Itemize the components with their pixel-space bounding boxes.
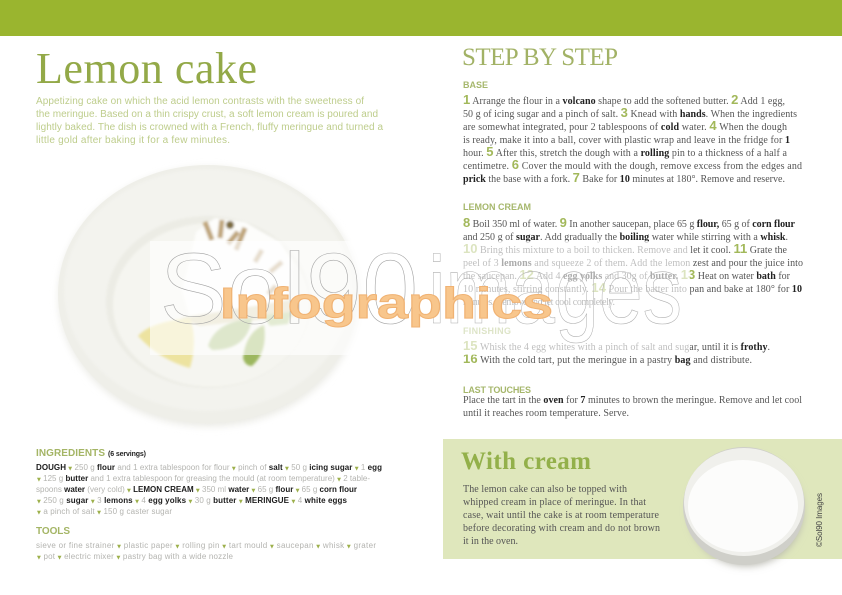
tools list [36, 541, 376, 561]
plate rim [58, 165, 358, 423]
section: last touches: Place the tart in the oven for 7 minutes to brown the meringue. Remove and let cool [463, 395, 802, 406]
watermark: Infographics [220, 279, 553, 328]
section: base: 1 Arrange the flour in a volcano shape to add the softened butter. 2 Add 1 egg, [463, 92, 785, 107]
title: Lemon cake [36, 44, 257, 93]
plate well [106, 216, 310, 388]
text: with cream [463, 484, 660, 547]
heading: with cream: With cream [461, 448, 591, 475]
section: base: BASE [463, 80, 488, 90]
intro paragraph: lightly baked. The dish is crowned with a French, fluffy meringue and turned a [36, 122, 383, 133]
tools [36, 526, 376, 561]
section: lemon cream: the saucepan. 12 Add 4 egg yolks and 30g of butter. 13 Heat on water bath for [463, 267, 791, 282]
section: lemon cream: LEMON CREAM [463, 202, 531, 212]
top green band [0, 0, 842, 36]
panel: with cream [443, 439, 842, 566]
ingredients list: ▼ 125 g butter and 1 extra tablespoon for greasing the mould (at room temperature) ▼ 2 table- [37, 474, 370, 483]
section: base [463, 80, 802, 185]
section: base: 50 g of icing sugar and a pinch of salt. 3 Knead with hands. When the ingredients [463, 105, 797, 120]
tools list: sieve or fine strainer ▼ plastic paper ▼ rolling pin ▼ tart mould ▼ saucepan ▼ whisk ▼ grater [36, 541, 376, 550]
section heading: step by step: STEP BY STEP [462, 44, 618, 71]
ingredients list [36, 463, 382, 516]
section: lemon cream: 10 Bring this mixture to a boil to thicken. Remove and let it cool. 11 Grate the [463, 241, 788, 256]
section: lemon cream [463, 202, 803, 308]
section: finishing: 15 Whisk the 4 egg whites with a pinch of salt and sugar, until it is frothy. [463, 338, 770, 353]
section: base: is ready, make it into a ball, cover with plastic wrap and leave in the fridge for 1 [463, 135, 790, 146]
section: lemon cream: 8 Boil 350 ml of water. 9 In another saucepan, place 65 g flour, 65 g of corn flour [463, 215, 796, 230]
intro paragraph: Appetizing cake on which the acid lemon contrasts with the sweetness of [36, 96, 364, 107]
section: finishing: 16 With the cold tart, put the meringue in a pastry bag and distribute. [463, 351, 752, 366]
meringue [180, 218, 296, 326]
ingredients list: ▼ a pinch of salt ▼ 150 g caster sugar [37, 507, 172, 516]
section: finishing [463, 326, 770, 366]
watermark: images [428, 237, 682, 344]
text: with cream: whipped cream in place of meringue. In that [463, 497, 646, 508]
ingredients [36, 448, 382, 516]
tools heading: TOOLS [36, 526, 70, 537]
intro paragraph: little gold after baking it for a few minutes. [36, 135, 230, 146]
text: with cream: case, wait until the cake is at room temperature [463, 510, 660, 521]
ingredients list: spoons water (very cold) ▼ LEMON CREAM ▼ 350 ml water ▼ 65 g flour ▼ 65 g corn flour [36, 485, 357, 494]
section: lemon cream: 10 minutes, stirring constantly. 14 Pour the batter into pan and bake at 180° for 10 [463, 280, 802, 295]
tools list: ▼ pot ▼ electric mixer ▼ pastry bag with a wide nozzle [37, 552, 234, 561]
icon: bowl of cream [683, 447, 805, 566]
section: base: prick the base with a fork. 7 Bake for 10 minutes at 180°. Remove and reserve. [463, 170, 785, 185]
section: last touches: LAST TOUCHES [463, 385, 531, 395]
section: base: are somewhat integrated, pour 2 tablespoons of cold water. 4 When the dough [463, 118, 787, 133]
watermark [150, 233, 690, 355]
servings: (6 servings) [108, 451, 146, 458]
section: lemon cream: and 250 g of sugar. Add gradually the boiling water while stirring with a whisk. [463, 232, 788, 243]
section: base: hour. 5 After this, stretch the dough with a rolling pin to a thickness of a half a [463, 144, 788, 159]
section: lemon cream: minutes. Remove and let cool completely. [463, 297, 615, 308]
ingredients list: DOUGH ▼ 250 g flour and 1 extra tablespoon for flour ▼ pinch of salt ▼ 50 g icing sugar ▼ 1 egg [36, 463, 382, 472]
plate shadow [59, 168, 359, 426]
intro paragraph [36, 96, 383, 146]
photo credit: ©Sol90 Images [815, 493, 824, 547]
lemon slice [138, 318, 194, 368]
text: with cream: before decorating with cream and do not brown [463, 523, 660, 534]
section: last touches [463, 385, 802, 419]
section: base: centimetre. 6 Cover the mould with the dough, remove excess from the edges and [463, 157, 802, 172]
text: with cream: The lemon cake can also be topped with [463, 484, 627, 495]
section: last touches: until it reaches room temperature. Serve. [463, 408, 629, 419]
watermark: Sol90 [160, 233, 418, 345]
ingredients list: ▼ 250 g sugar ▼ 3 lemons ▼ 4 egg yolks ▼ 30 g butter ▼ MERINGUE ▼ 4 white eggs [37, 496, 348, 505]
mint leaves [208, 312, 292, 366]
photo: lemon cake on a plate [58, 165, 359, 426]
section: lemon cream: peel of 3 lemons and squeeze 2 of them. Add the lemon zest and pour the juice into [463, 258, 803, 269]
intro paragraph: the meringue. Based on a thin crispy crust, a soft lemon cream is poured and [36, 109, 378, 120]
section: finishing: FINISHING [463, 326, 511, 336]
ingredients heading: INGREDIENTS [36, 448, 105, 459]
text: with cream: it in the oven. [463, 536, 518, 547]
